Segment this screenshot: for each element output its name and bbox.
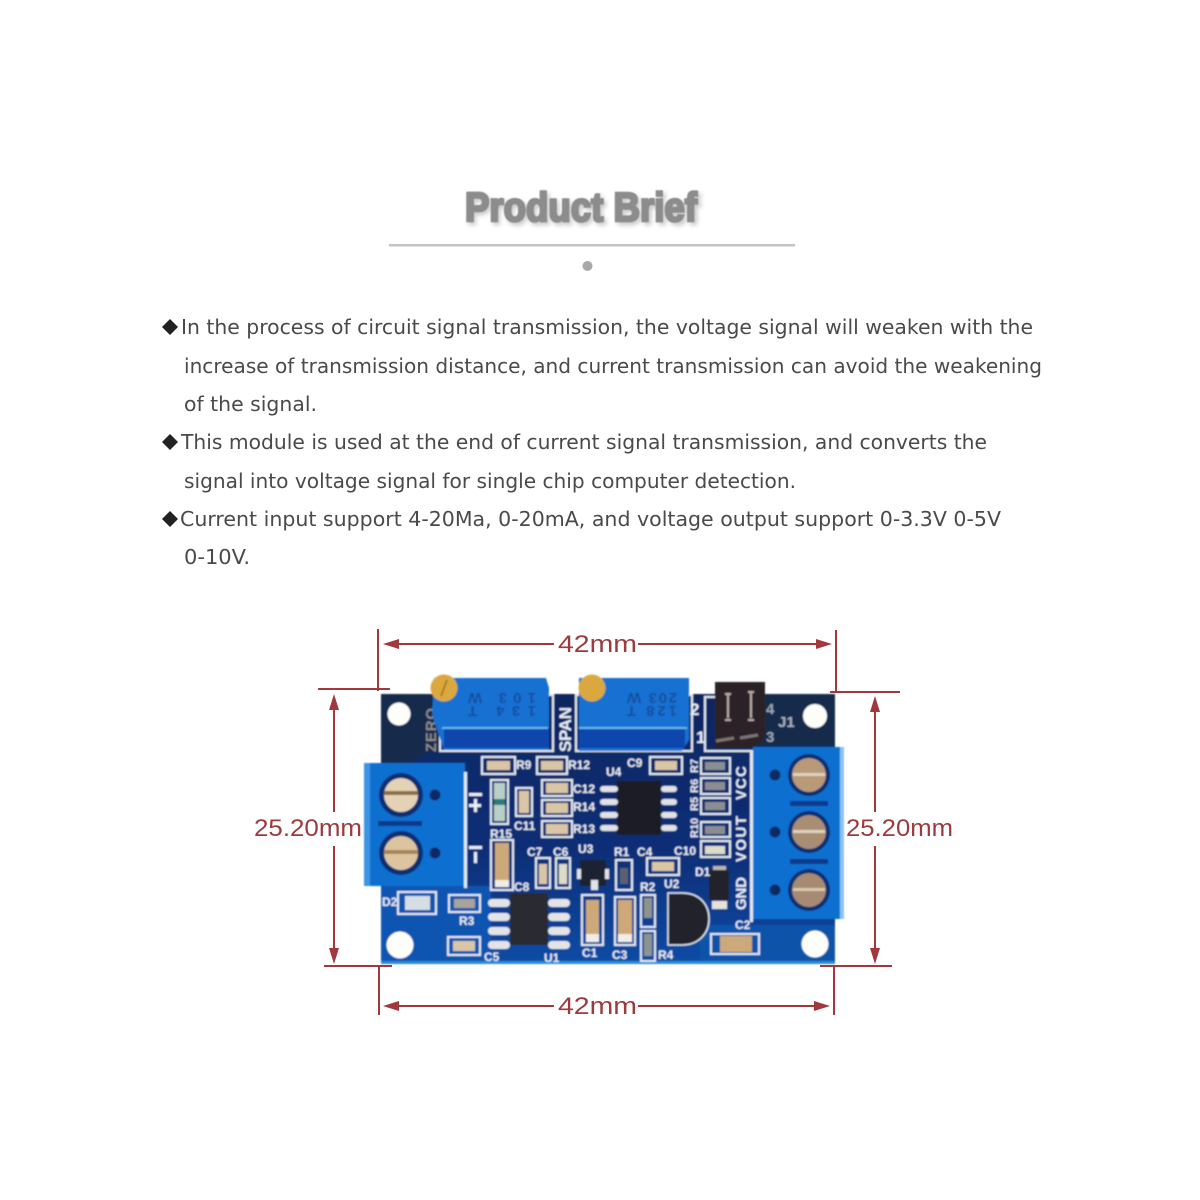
- PCB: [381, 694, 835, 964]
- component designators: R1: [614, 845, 630, 859]
- mounting holes: [386, 702, 828, 958]
- ZERO label: ZERO: [423, 708, 440, 752]
- jumper J1: 3: [766, 729, 774, 746]
- output labels: VOUT: [733, 816, 750, 862]
- potentiometer: span: 203 W: [626, 689, 677, 706]
- bullet 1: of the signal.: [184, 392, 317, 416]
- component designators: D1: [695, 865, 711, 879]
- component designators: C2: [735, 918, 751, 932]
- component designators: R2: [640, 880, 656, 894]
- component designators: U4: [606, 765, 622, 779]
- bullet 3: [162, 507, 1001, 569]
- IC U4: [600, 781, 677, 835]
- potentiometer: zero: [430, 674, 553, 751]
- component designators: R13: [573, 822, 595, 836]
- component designators: C5: [484, 950, 500, 964]
- jumper J1: 2: [690, 700, 699, 719]
- component designators: C9: [627, 756, 643, 770]
- component designators: R9: [516, 758, 532, 772]
- component designators: R15: [490, 827, 512, 841]
- component designators: R14: [573, 800, 595, 814]
- component designators: C11: [514, 819, 536, 833]
- left terminal block: [364, 763, 467, 888]
- title: Product Brief: Product Brief: [465, 184, 697, 230]
- component designators: C4: [637, 845, 653, 859]
- component designators: U2: [664, 877, 680, 891]
- potentiometer: zero: 134 T: [468, 702, 536, 719]
- component designators: R6: [689, 779, 701, 793]
- component designators: R3: [459, 914, 475, 928]
- component designators: C12: [573, 782, 595, 796]
- component designators: R4: [658, 948, 674, 962]
- component designators: R5: [689, 797, 701, 811]
- dimension: right height 25.20mm: [820, 692, 953, 966]
- jumper J1: 4: [766, 701, 775, 718]
- diode D1: [709, 866, 729, 909]
- component designators: R12: [568, 758, 590, 772]
- title divider line: [389, 244, 795, 246]
- bullet 2: [162, 430, 987, 493]
- bullet 1: [162, 315, 1042, 416]
- component designators: U3: [578, 842, 594, 856]
- output labels: [733, 766, 750, 910]
- component designators: R10: [689, 818, 701, 838]
- dimension: top width 42mm: [378, 629, 836, 692]
- dimension: bottom width 42mm: [379, 966, 834, 1020]
- dimension: right height 25.20mm: 25.20mm: [846, 815, 953, 842]
- bullet 3: 0-10V.: [184, 545, 250, 569]
- jumper J1: [690, 682, 795, 751]
- bullet 1: In the process of circuit signal transmission, the voltage signal will weaken with the: [181, 315, 1033, 339]
- component designators: U1: [544, 951, 560, 965]
- output labels: VCC: [733, 766, 750, 800]
- dimension: left height 25.20mm: [254, 689, 392, 966]
- bullet 2: This module is used at the end of current signal transmission, and converts the: [180, 430, 987, 454]
- component designators: C3: [612, 948, 628, 962]
- component designators: C10: [674, 844, 696, 858]
- potentiometer: zero: 103 W: [467, 689, 536, 706]
- jumper J1: 1: [696, 728, 705, 747]
- IC U1: [488, 893, 570, 949]
- circuit board module: [364, 674, 844, 965]
- component designators: D2: [382, 895, 398, 909]
- potentiometer: span: [576, 674, 692, 751]
- component designators: C8: [514, 880, 530, 894]
- SMD resistors and capacitors: [398, 757, 759, 961]
- polarity marks: [469, 793, 482, 863]
- title divider dot: [582, 261, 592, 271]
- dimension: left height 25.20mm: 25.20mm: [254, 815, 362, 842]
- bullet 3: Current input support 4-20Ma, 0-20mA, and voltage output support 0-3.3V 0-5V: [180, 507, 1001, 531]
- component designators: C1: [582, 946, 598, 960]
- component designators: [382, 756, 751, 965]
- right terminal block: [750, 747, 844, 922]
- component designators: R7: [689, 759, 701, 773]
- title: Product Brief: Product Brief: [467, 187, 700, 233]
- regulator U2: [668, 893, 709, 945]
- dimension: bottom width 42mm: 42mm: [558, 993, 637, 1020]
- component designators: C7: [527, 845, 543, 859]
- SPAN label: SPAN: [556, 707, 575, 752]
- bullet 1: increase of transmission distance, and current transmission can avoid the weakening: [184, 354, 1042, 378]
- dimension: top width 42mm: 42mm: [558, 631, 637, 658]
- transistor U3: [577, 860, 609, 890]
- jumper J1: J1: [778, 714, 795, 731]
- output labels: GND: [733, 877, 750, 910]
- potentiometer: span: 128 T: [627, 702, 677, 719]
- component designators: C6: [553, 845, 569, 859]
- text block: product description: [162, 315, 1042, 569]
- bullet 2: signal into voltage signal for single chip computer detection.: [184, 469, 796, 493]
